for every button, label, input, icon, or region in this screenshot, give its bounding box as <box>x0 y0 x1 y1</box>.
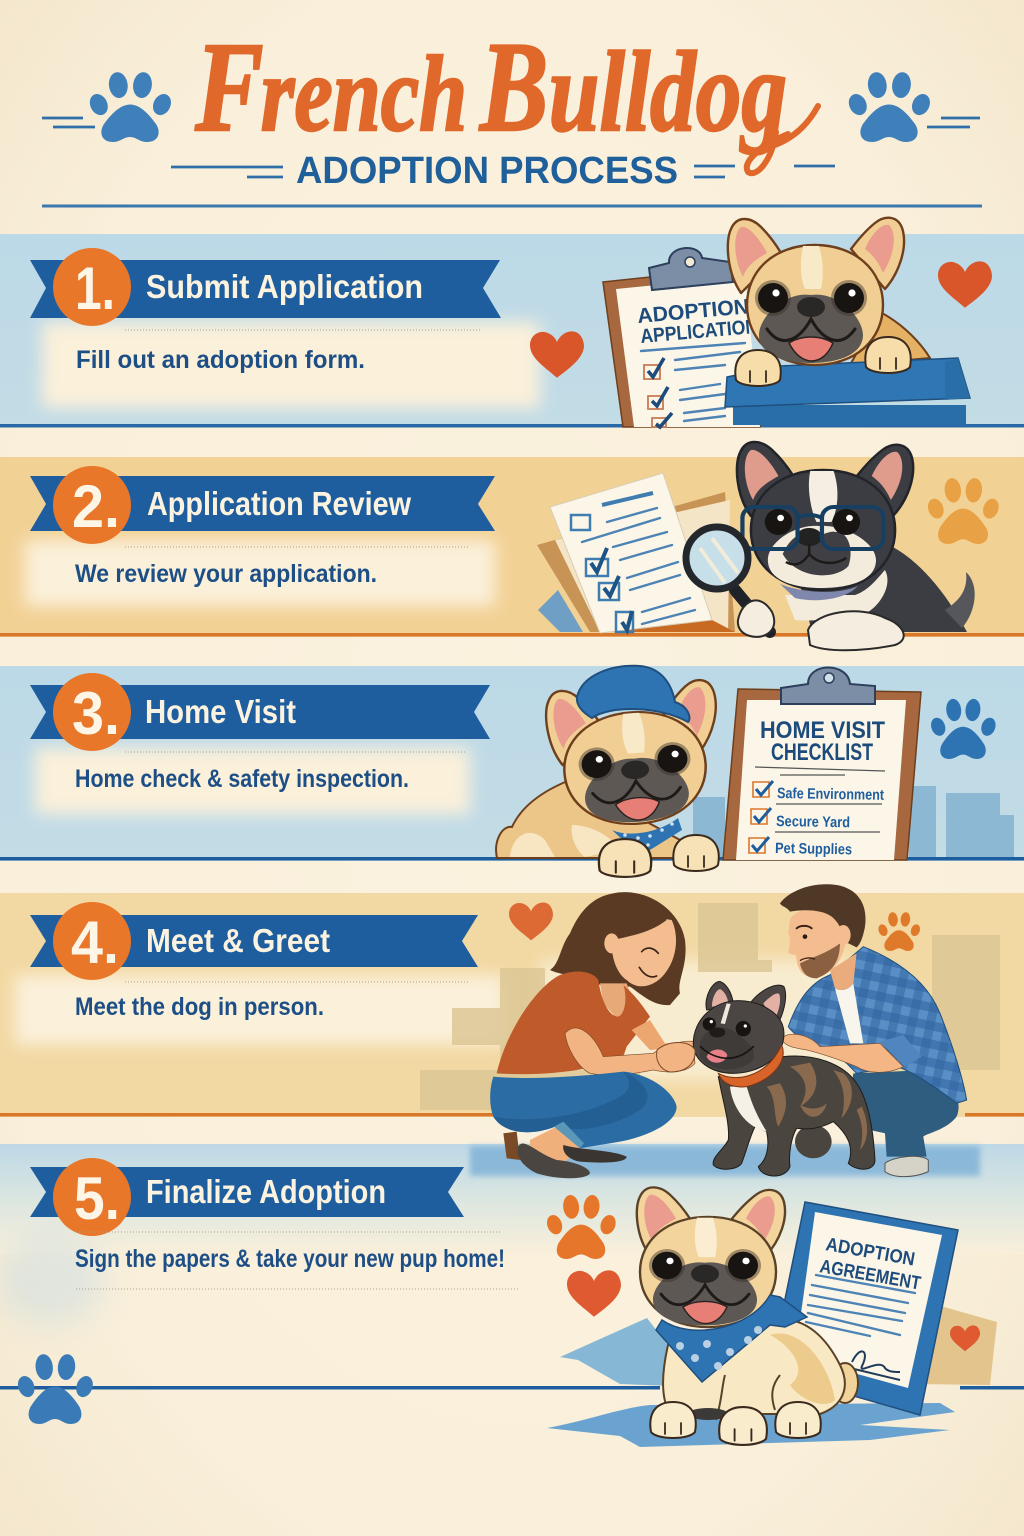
glasses <box>742 507 883 549</box>
subtitle: ADOPTION PROCESS <box>296 150 678 192</box>
cream text wash <box>25 540 495 606</box>
step heading: Meet & Greet <box>146 922 330 959</box>
band <box>0 457 1024 637</box>
blue cap <box>577 666 689 722</box>
icon: left paw <box>87 71 174 142</box>
title flourishes <box>42 118 980 177</box>
illustration: adoption clipboard: APPLICATION <box>640 316 759 348</box>
title: French Bulldog: ulldog <box>549 30 787 155</box>
step description: Sign the papers & take your new pup home! <box>75 1245 505 1273</box>
illustration: capped dog head <box>544 679 724 830</box>
man <box>780 884 967 1177</box>
illustration: magnifying glass <box>686 527 774 637</box>
ribbon <box>30 915 478 967</box>
ribbon <box>30 685 490 739</box>
number badge: 5. <box>74 1165 120 1232</box>
icon: paw <box>925 477 1001 544</box>
title: French Bulldog: rench <box>261 35 489 154</box>
panel: step 4 <box>0 893 1024 1117</box>
dog paws <box>599 835 719 877</box>
illustration: meet and greet scene <box>470 884 980 1178</box>
title block <box>42 17 982 208</box>
illustration: dotted collar <box>612 818 682 850</box>
band rule left <box>0 1386 660 1390</box>
illustration: adoption clipboard: ADOPTION <box>636 295 750 328</box>
number badge <box>53 902 131 980</box>
illustration: home visit checklist: Pet Supplies <box>775 840 852 858</box>
cream centre wash <box>540 960 860 1080</box>
icon: heart right <box>938 261 992 308</box>
step description: Home check & safety inspection. <box>75 765 409 793</box>
number badge: 4. <box>71 909 119 976</box>
illustration: envelope <box>915 1305 997 1385</box>
band rule <box>0 633 1024 636</box>
band rule right <box>960 1386 1024 1390</box>
illustration: adoption agreement: ADOPTION <box>824 1234 916 1271</box>
step heading: Home Visit <box>145 693 296 730</box>
header divider <box>42 204 982 208</box>
panel: step 5 <box>0 1144 1024 1447</box>
illustration: home visit checklist: CHECKLIST <box>771 739 873 766</box>
faded buildings <box>420 903 1000 1110</box>
step description: Fill out an adoption form. <box>76 346 365 374</box>
illustration: collar <box>780 584 858 600</box>
ribbon <box>30 260 501 318</box>
icon: heart left <box>530 331 584 378</box>
floor <box>470 1146 980 1176</box>
illustration: blue bandana <box>656 1295 807 1382</box>
band rule <box>0 424 1024 428</box>
illustration: black dog head <box>737 442 913 590</box>
icon: orange paw <box>544 1194 618 1259</box>
icon: heart <box>509 903 553 940</box>
illustration: papers and folder <box>537 473 735 633</box>
band rule right <box>965 1113 1024 1116</box>
illustration: blue box <box>725 358 970 425</box>
left blue wash <box>0 1235 105 1325</box>
cream text wash <box>35 748 470 814</box>
illustration: blue ground shards <box>547 1318 973 1447</box>
band rule <box>0 1113 500 1116</box>
icon: right paw <box>846 71 933 142</box>
step description: We review your application. <box>75 560 377 588</box>
cream text wash <box>15 975 505 1045</box>
panel: step 3 <box>0 666 1024 877</box>
title: French Bulldog: F <box>194 17 264 159</box>
number badge <box>53 673 131 751</box>
number badge: 1. <box>75 255 115 322</box>
icon: bottom-left paw <box>15 1353 96 1424</box>
illustration: cream dog head <box>637 1187 785 1327</box>
title g flourish <box>747 106 818 173</box>
band <box>0 666 1024 861</box>
illustration: black dog body <box>785 547 975 650</box>
woman hands <box>657 1042 695 1072</box>
illustration: home visit checklist: Secure Yard <box>776 813 850 831</box>
illustration: tan dog body <box>496 780 700 858</box>
panel: step 1 <box>0 218 1024 428</box>
illustration: adoption clipboard <box>603 248 760 427</box>
panel: step 2 <box>0 442 1024 650</box>
cream text wash <box>42 322 540 408</box>
illustration: home visit checklist <box>723 668 921 860</box>
icon: small heart <box>950 1325 980 1351</box>
number badge: 2. <box>72 473 120 540</box>
icon: heart <box>567 1270 621 1317</box>
step heading: Finalize Adoption <box>146 1173 386 1210</box>
icon: paw <box>877 912 922 951</box>
band <box>0 1144 1024 1254</box>
faded buildings <box>693 786 1014 857</box>
woman <box>490 892 695 1178</box>
step description: Meet the dog in person. <box>75 993 324 1021</box>
illustration: home visit checklist: HOME VISIT <box>760 717 885 744</box>
ribbon <box>30 476 495 531</box>
dog paws <box>735 337 911 386</box>
band <box>0 234 1024 427</box>
number badge <box>53 466 131 544</box>
band rule <box>0 857 1024 860</box>
band <box>0 893 1024 1117</box>
step heading: Application Review <box>147 485 411 522</box>
illustration: dog body <box>850 312 930 365</box>
icon: paw <box>929 698 998 759</box>
illustration: home visit checklist: Safe Environment <box>777 785 884 804</box>
illustration: cream dog body <box>650 1320 858 1445</box>
number badge <box>53 248 131 326</box>
number badge: 3. <box>72 680 120 747</box>
illustration: adoption agreement: AGREEMENT <box>818 1256 923 1295</box>
number badge <box>53 1158 131 1236</box>
step heading: Submit Application <box>146 268 423 305</box>
ribbon <box>30 1167 464 1217</box>
title: French Bulldog: B <box>478 17 548 159</box>
brindle dog <box>693 982 875 1176</box>
illustration: tan dog head <box>728 218 904 365</box>
illustration: adoption agreement <box>770 1202 958 1415</box>
